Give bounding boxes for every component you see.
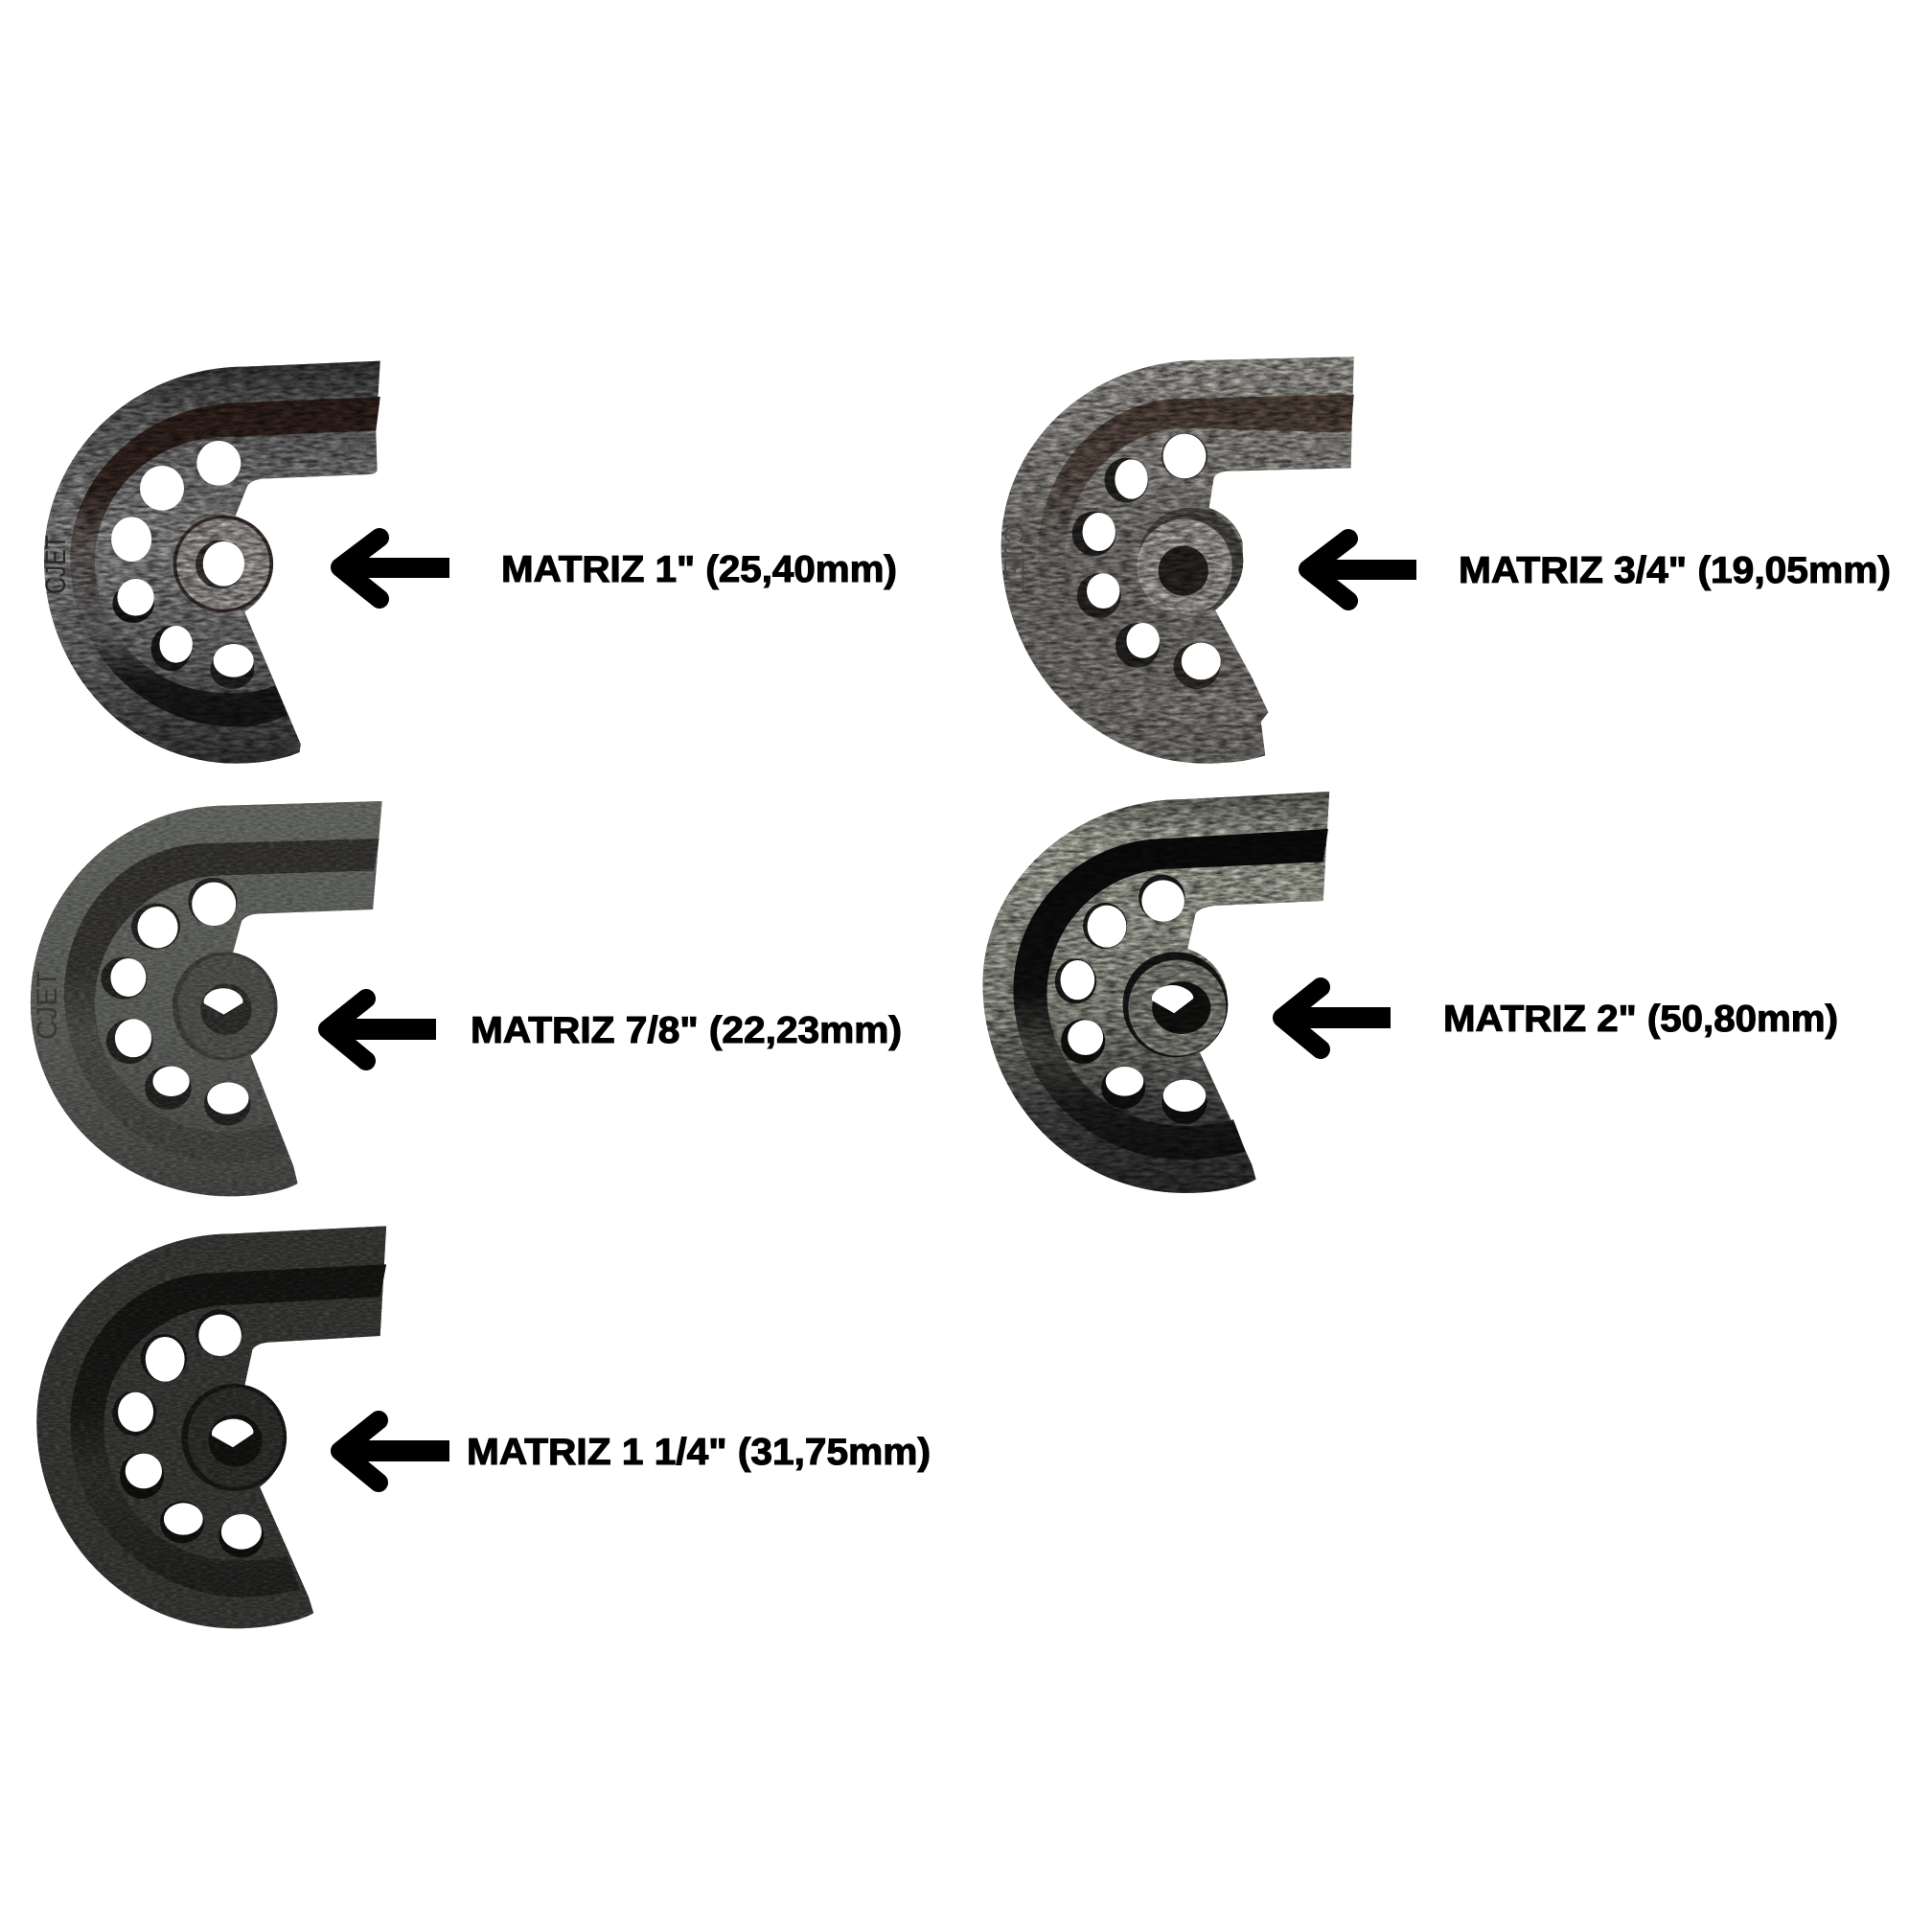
arrow: [1285, 1007, 1391, 1028]
panel: matriz 3/4: [998, 356, 1891, 764]
die photo: matriz 1 1/4: [36, 1226, 386, 1628]
arrow head: [340, 1420, 379, 1483]
label: MATRIZ 3/4" (19,05mm): [1459, 550, 1891, 591]
arrow head: [1282, 987, 1321, 1049]
arrow: [343, 558, 449, 578]
panel: matriz 7/8: [31, 801, 902, 1196]
arrow: [331, 1019, 436, 1040]
die photo: matriz 7/8: [31, 801, 382, 1196]
die photo: matriz 2 polegadas: [983, 792, 1329, 1193]
panel: matriz 1 1/4: [36, 1226, 931, 1628]
arrow: [1311, 560, 1416, 580]
arrow: [343, 1440, 449, 1461]
die marking: CJET: [40, 535, 72, 594]
arrow head: [328, 999, 366, 1061]
label: MATRIZ 1 1/4" (31,75mm): [467, 1432, 931, 1473]
die marking: CJET: [998, 524, 1029, 591]
panel: matriz 1 polegada: [40, 361, 897, 764]
arrow head: [1308, 539, 1348, 601]
label: MATRIZ 2" (50,80mm): [1443, 999, 1838, 1040]
die photo: matriz 3/4: [1001, 356, 1354, 764]
die marking: CJET: [32, 971, 63, 1040]
arrow head: [340, 538, 380, 599]
label: MATRIZ 7/8" (22,23mm): [471, 1010, 902, 1051]
die photo: matriz 1 polegada: [44, 361, 380, 764]
panel: matriz 2 polegadas: [983, 792, 1838, 1193]
label: MATRIZ 1" (25,40mm): [501, 549, 897, 590]
